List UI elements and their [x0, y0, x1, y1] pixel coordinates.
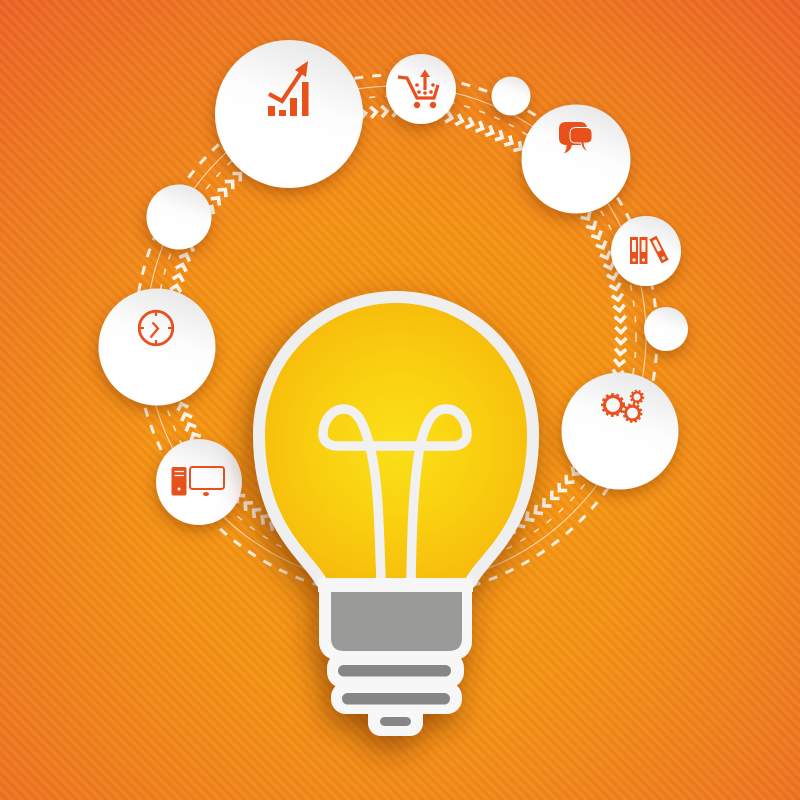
disc: gears: [562, 372, 678, 490]
icon: bar chart with rising arrow: [268, 61, 308, 116]
thread bar 1: [338, 665, 451, 676]
disc: computer: [156, 439, 242, 525]
icon: speech bubbles: [559, 122, 592, 154]
disc: growth chart: [215, 40, 363, 188]
disc: small blank top: [492, 76, 530, 116]
icon: desktop computer: [172, 467, 224, 496]
collar strip: [318, 578, 473, 592]
disc: shopping cart: [386, 54, 456, 124]
icon: three gears: [602, 391, 643, 422]
socket: grey panel: [331, 592, 462, 651]
icon: clock: [139, 311, 173, 345]
thread bar 2: [342, 693, 450, 704]
disc: small blank left: [146, 184, 212, 250]
ring: inner dashed line: [156, 96, 636, 576]
disc: speech bubbles: [522, 104, 630, 214]
light bulb: [265, 303, 527, 736]
disc: binders: [611, 216, 681, 286]
glass: yellow glow: [265, 303, 527, 578]
disc: clock: [98, 288, 216, 406]
tip bar: [380, 717, 411, 726]
ring: thin solid line: [146, 86, 646, 586]
disc: small blank right: [644, 307, 688, 351]
icon: three binders: [630, 236, 669, 264]
icon: shopping cart with up arrow: [398, 70, 438, 108]
filament: [323, 409, 467, 580]
ring: outer dashed line: [135, 75, 657, 597]
ring: chevron arrows running clockwise: [145, 86, 642, 583]
bulb silhouette: white outline: [265, 303, 527, 736]
